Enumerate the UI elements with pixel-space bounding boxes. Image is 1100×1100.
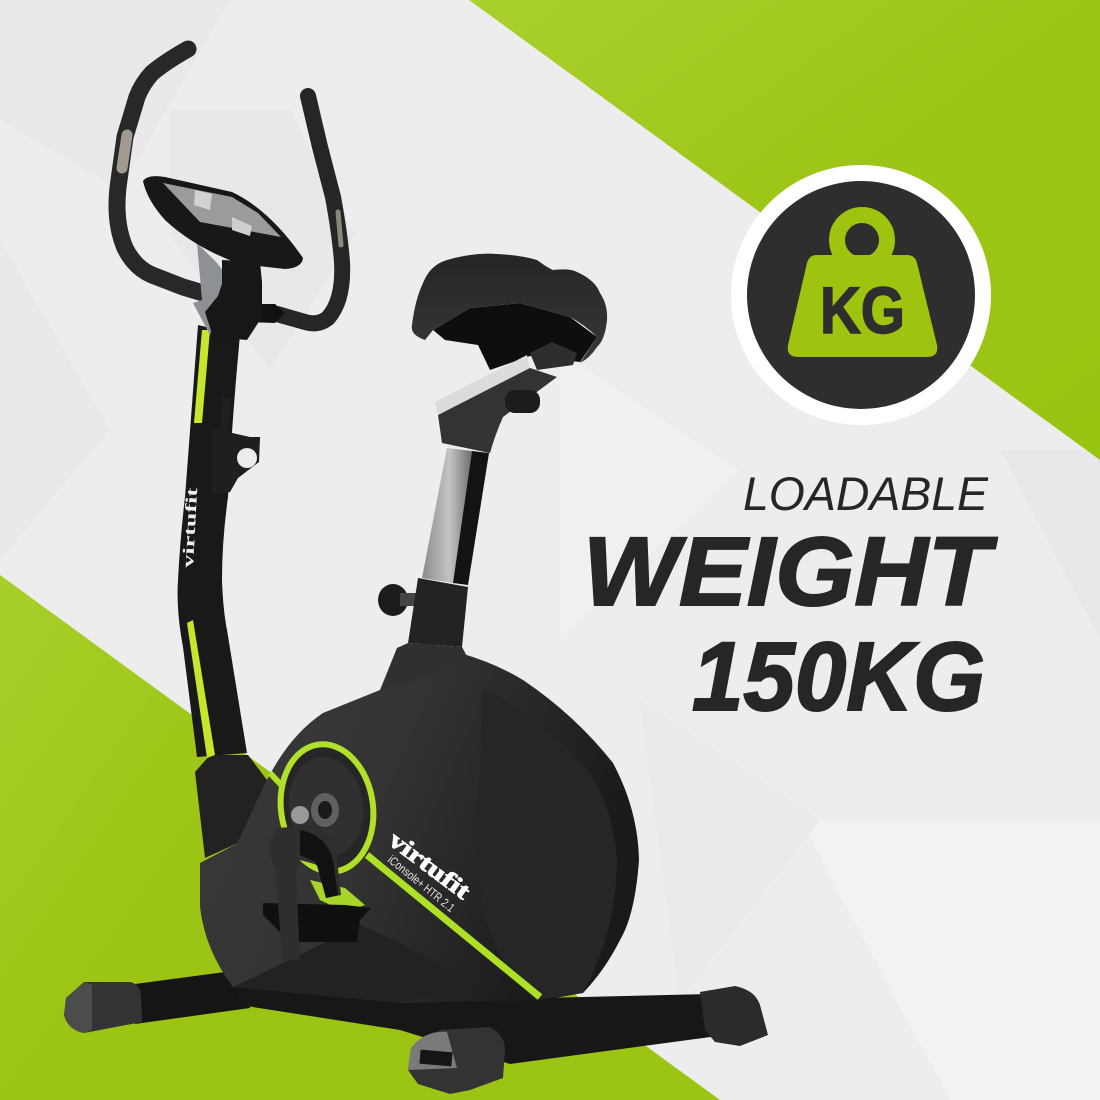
base panel — [233, 925, 470, 1003]
frame feet — [64, 970, 768, 1094]
post brand text: virtufit — [180, 486, 201, 568]
handlebar grip — [243, 304, 285, 323]
icon: kettlebell weight badge — [731, 165, 991, 425]
green stripe on housing — [367, 855, 540, 997]
housing brand text: virtufit — [383, 827, 475, 905]
green corner top right — [469, 0, 1100, 460]
pedal — [263, 806, 371, 960]
heading: loadable weight 150kg: WEIGHT — [583, 517, 998, 626]
housing model text: iConsole+ HTR 2.1 — [385, 852, 458, 915]
green corner bottom left — [0, 575, 720, 1100]
exercise bike — [64, 49, 768, 1094]
upright post — [178, 325, 247, 757]
main flywheel housing — [200, 644, 639, 1003]
upright lower shroud — [195, 755, 267, 858]
heading: loadable weight 150kg — [583, 467, 998, 731]
heading: loadable weight 150kg: LOADABLE — [743, 467, 989, 520]
seat bracket — [435, 342, 577, 453]
green stripes on post — [187, 330, 215, 758]
bottle holder — [212, 398, 260, 495]
console mount — [193, 243, 262, 340]
seat post — [382, 448, 489, 690]
handlebar — [117, 49, 342, 323]
housing right panel shade — [477, 687, 617, 1000]
seat — [412, 254, 607, 363]
heading: loadable weight 150kg: 150KG — [692, 622, 985, 731]
green stripe by shroud — [270, 773, 285, 789]
seat underside — [433, 303, 597, 370]
icon: kettlebell weight badge: KG — [820, 273, 905, 347]
adjustment knob — [378, 584, 420, 616]
green ring on flywheel — [273, 738, 381, 878]
console — [143, 176, 303, 269]
